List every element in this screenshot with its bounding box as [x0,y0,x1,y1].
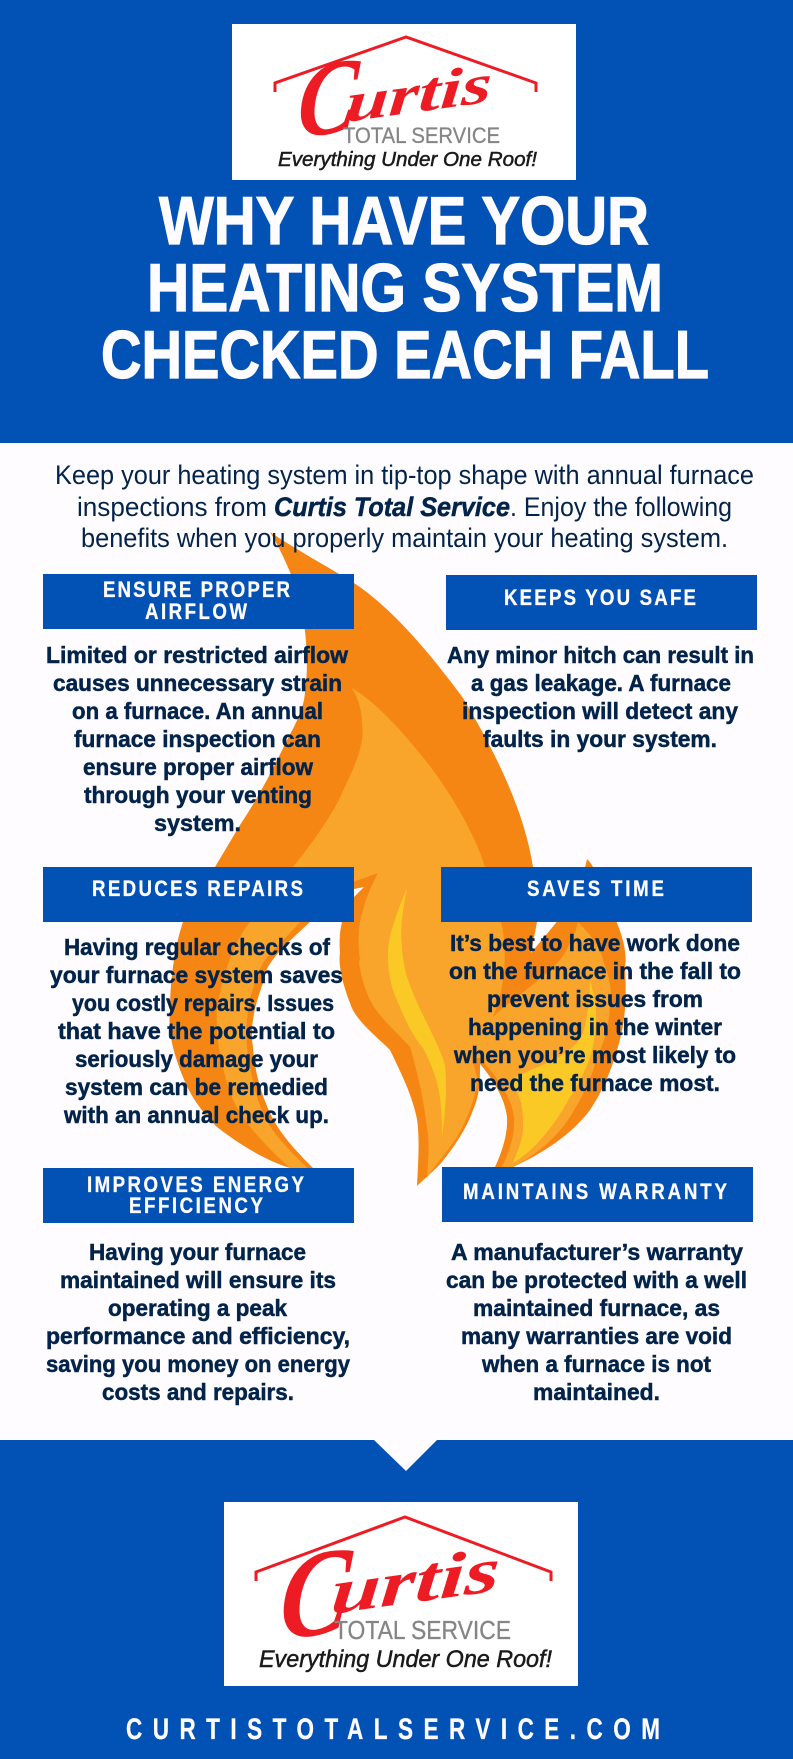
top logo: Everything Under One Roof! [278,149,537,171]
text: ensure proper airflow: ensure proper airflow [83,754,314,780]
heading: reduces repairs [43,867,354,922]
text: reduces repairs: you costly repairs. Issues [72,990,334,1016]
text: improves energy efficiency: saving you money on energy [46,1351,350,1377]
intro text [55,460,754,553]
text: ensure proper airflow: causes unnecessary strain [53,670,342,696]
text: reduces repairs: system can be remedied [65,1074,328,1100]
top logo: urtis [344,52,494,135]
text: reduces repairs: that have the potential to [58,1018,335,1044]
panel: maintains warranty [442,1167,753,1405]
text: saves time: It’s best to have work done [450,930,740,956]
title [101,183,709,393]
bottom logo [224,1502,578,1686]
text: saves time: happening in the winter [468,1014,722,1040]
text: reduces repairs: your furnace system saves [50,962,343,988]
intro text: benefits when you properly maintain your heating system. [81,523,728,553]
text: ensure proper airflow: Limited or restricted airflow [46,642,349,668]
text: saves time: need the furnace most. [470,1070,720,1096]
text: maintains warranty: can be protected with a well [446,1267,747,1293]
heading: saves time: SAVES TIME [527,878,664,901]
text: reduces repairs: Having regular checks of [64,934,330,960]
text: saves time [449,930,741,1096]
text: maintains warranty: many warranties are void [461,1323,732,1349]
text: saves time: on the furnace in the fall to [449,958,741,984]
text: improves energy efficiency: operating a peak [108,1295,288,1321]
text: reduces repairs [50,934,343,1128]
text: ensure proper airflow: on a furnace. An annual [72,698,323,724]
text: keeps you safe: inspection will detect any [462,698,738,724]
text: maintains warranty: maintained furnace, as [473,1295,720,1321]
text: ensure proper airflow: through your venting [84,782,312,808]
heading: maintains warranty [442,1167,753,1222]
heading: saves time [441,867,752,922]
bottom logo: urtis [329,1533,502,1628]
heading: ensure proper airflow [43,574,354,629]
website url: CURTISTOTALSERVICE.COM [126,1712,660,1746]
bottom logo: Everything Under One Roof! [259,1646,552,1673]
text: keeps you safe: faults in your system. [483,726,717,752]
heading: improves energy efficiency [43,1168,354,1223]
heading: improves energy efficiency: EFFICIENCY [129,1195,263,1218]
intro text: Keep your heating system in tip-top shape with annual furnace [55,460,754,490]
text: reduces repairs: with an annual check up. [63,1102,329,1128]
bottom logo: TOTAL SERVICE [334,1615,511,1645]
text: maintains warranty: A manufacturer’s warranty [451,1239,743,1265]
text: improves energy efficiency: costs and repairs. [102,1379,294,1405]
heading: maintains warranty: MAINTAINS WARRANTY [463,1181,727,1204]
text: ensure proper airflow: system. [154,810,241,836]
header band [0,0,793,443]
heading: ensure proper airflow: ENSURE PROPER [103,579,290,602]
panel: improves energy efficiency [43,1168,354,1405]
text: improves energy efficiency: maintained will ensure its [60,1267,336,1293]
footer band [0,1440,793,1759]
heading: ensure proper airflow: AIRFLOW [145,601,248,624]
text: maintains warranty: when a furnace is not [481,1351,711,1377]
heading: keeps you safe: KEEPS YOU SAFE [504,587,696,610]
panel: saves time [441,867,752,1096]
text: keeps you safe [447,642,754,752]
text: ensure proper airflow [46,642,349,836]
text: keeps you safe: Any minor hitch can result in [447,642,754,668]
panel: reduces repairs [43,867,354,1128]
text: saves time: prevent issues from [487,986,703,1012]
top logo: C [294,34,363,161]
intro text: . Enjoy the following [510,492,732,522]
bottom logo: C [276,1519,357,1667]
text: reduces repairs: seriously damage your [75,1046,318,1072]
intro text: Curtis Total Service [274,492,510,522]
arrow: footer notch [374,1440,437,1471]
text: improves energy efficiency [46,1239,350,1405]
text: maintains warranty [446,1239,747,1405]
illustration: flame [170,532,626,1186]
top logo [232,24,576,180]
intro text: inspections from [77,492,267,522]
text: improves energy efficiency: performance and efficiency, [46,1323,350,1349]
text: saves time: when you’re most likely to [453,1042,736,1068]
panel: ensure proper airflow [43,574,354,836]
top logo: TOTAL SERVICE [343,123,500,148]
text: improves energy efficiency: Having your furnace [89,1239,306,1265]
panel: keeps you safe [446,575,757,752]
title: HEATING SYSTEM [147,250,663,326]
text: ensure proper airflow: furnace inspection can [74,726,321,752]
text: maintains warranty: maintained. [533,1379,660,1405]
heading: improves energy efficiency: IMPROVES ENERGY [87,1174,304,1197]
text: keeps you safe: a gas leakage. A furnace [471,670,731,696]
title: WHY HAVE YOUR [159,183,649,259]
heading: keeps you safe [446,575,757,630]
heading: reduces repairs: REDUCES REPAIRS [92,878,303,901]
